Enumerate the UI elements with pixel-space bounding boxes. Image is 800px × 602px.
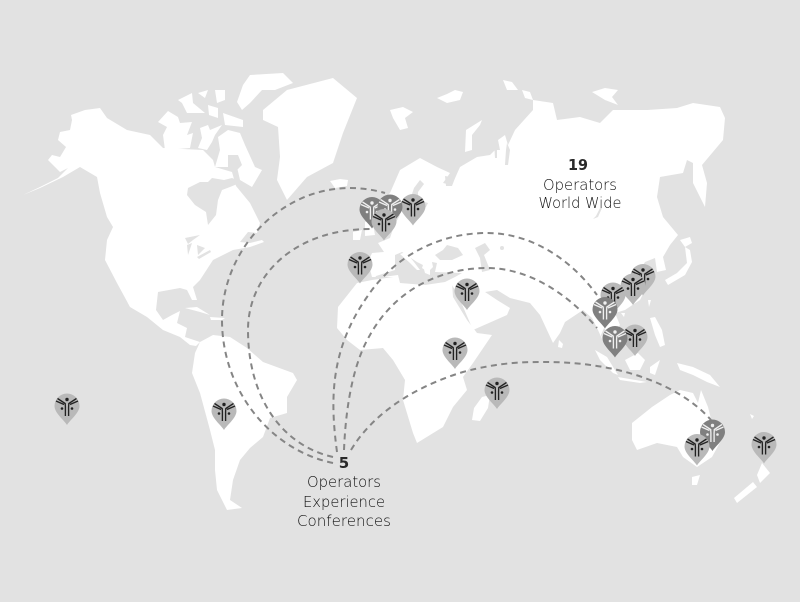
world map bbox=[23, 73, 770, 510]
label: operators experience conferences: Conferences bbox=[297, 512, 391, 530]
pin: Europe dark east bbox=[378, 194, 402, 226]
Hudson Bay bbox=[187, 178, 242, 225]
pin: Sydney bbox=[700, 420, 725, 451]
pin: China bbox=[600, 282, 626, 314]
label: operators experience conferences: Operators bbox=[307, 473, 381, 491]
arc to East Asia bbox=[333, 233, 597, 452]
dashed arcs bbox=[222, 188, 711, 463]
label: operators world wide: 19 bbox=[568, 156, 588, 174]
Australia bbox=[632, 390, 723, 467]
arc to northern Europe bbox=[222, 188, 385, 463]
Iceland bbox=[330, 179, 348, 188]
pin: Singapore bbox=[602, 326, 628, 358]
pin: New Zealand bbox=[752, 432, 776, 464]
South America bbox=[192, 335, 297, 510]
Italy and Greece bbox=[400, 252, 430, 275]
pin: East Africa bbox=[442, 338, 468, 369]
pin: Peru bbox=[212, 398, 236, 430]
pin: Arabia bbox=[454, 278, 480, 310]
Africa bbox=[337, 276, 492, 443]
North America bbox=[23, 108, 264, 346]
label: operators world wide: World Wide bbox=[538, 194, 622, 212]
arc to South East Asia bbox=[344, 268, 597, 450]
label: operators experience conferences: Experience bbox=[303, 493, 385, 511]
pin: Taiwan bbox=[620, 274, 646, 305]
pin: Melbourne bbox=[684, 434, 710, 466]
label: operators world wide bbox=[538, 156, 622, 212]
pin: Europe dark west bbox=[360, 197, 384, 228]
Mediterranean bbox=[375, 252, 462, 285]
label: operators experience conferences: 5 bbox=[339, 454, 349, 472]
White Sea bbox=[445, 176, 455, 186]
pin: Europe light bbox=[372, 209, 396, 240]
pin: Germany bbox=[400, 194, 426, 226]
Greenland bbox=[263, 78, 357, 200]
Canadian Arctic islands bbox=[158, 73, 293, 187]
inland seas bbox=[185, 142, 602, 285]
Baltic bbox=[410, 180, 428, 207]
Black Sea bbox=[435, 245, 463, 260]
pin: Seychelles bbox=[484, 378, 510, 409]
pin: Canary Islands bbox=[348, 252, 372, 284]
label: operators world wide: Operators bbox=[543, 176, 617, 194]
Islands bbox=[185, 80, 770, 503]
pin: Thailand bbox=[592, 297, 618, 328]
pin: Pacific bbox=[54, 394, 80, 425]
arc to Australia bbox=[351, 362, 711, 450]
pin: Japan bbox=[630, 264, 656, 296]
pin: Brunei bbox=[622, 324, 648, 356]
Lake Baikal bbox=[593, 208, 602, 219]
Caspian Sea bbox=[475, 243, 490, 272]
arc to western Europe bbox=[248, 229, 370, 457]
label: operators experience conferences bbox=[297, 454, 391, 530]
Eurasia bbox=[368, 100, 725, 350]
Great Lakes bbox=[185, 235, 211, 259]
Foxe Basin bbox=[228, 155, 242, 172]
Gulf of Ob bbox=[494, 142, 510, 165]
pins bbox=[54, 194, 776, 466]
